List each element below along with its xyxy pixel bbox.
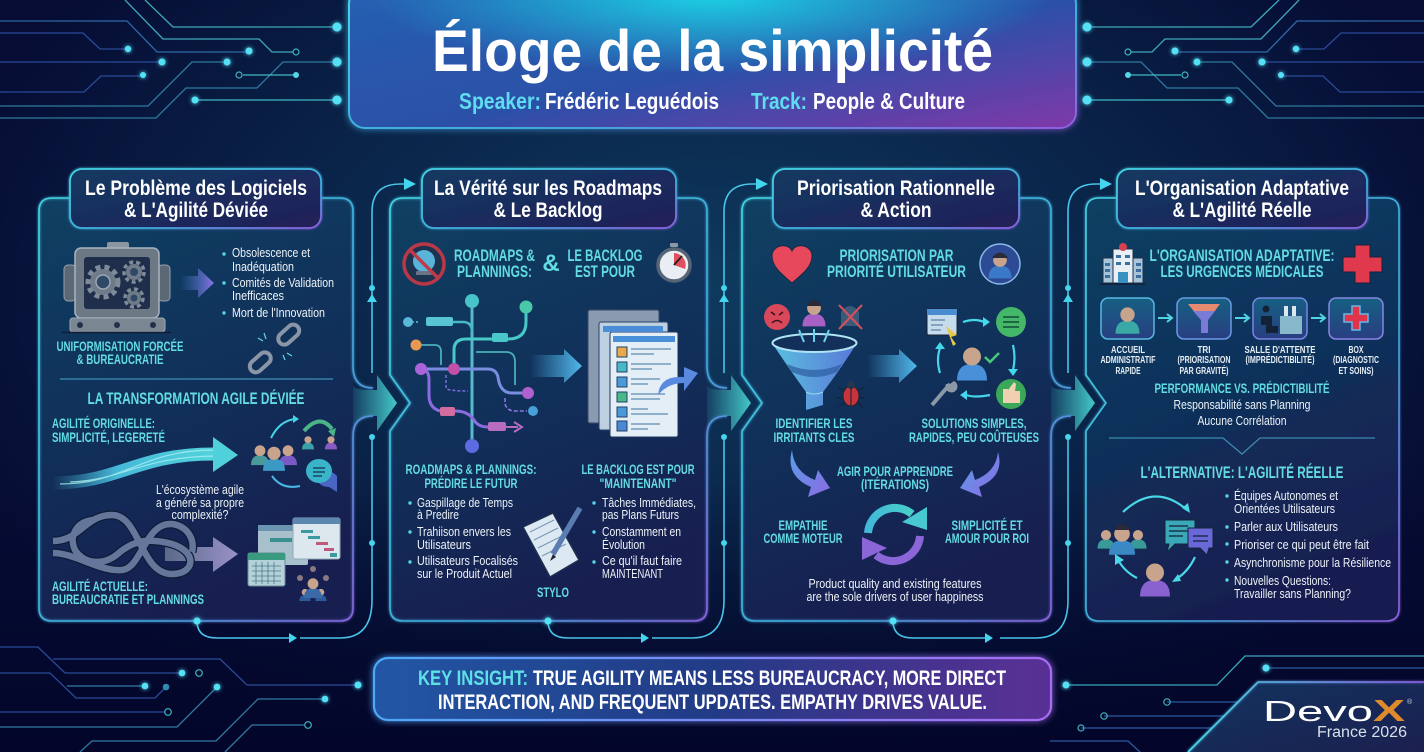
footnote text bbox=[806, 576, 984, 604]
panel 4: organisation adaptative bbox=[1086, 169, 1399, 621]
speaker and track: Speaker: bbox=[459, 88, 541, 114]
callout: key insight: INTERACTION, AND FREQUENT UPDATES. EMPATHY DRIVES VALUE. bbox=[438, 691, 987, 714]
connector: panel 1 to panel 2 bbox=[194, 178, 416, 643]
column heading: backlog bbox=[582, 461, 694, 491]
bullet list: backlog: Ce qu'il faut faire bbox=[602, 553, 682, 568]
label: irritants: IRRITANTS CLES bbox=[774, 429, 854, 445]
bullet list: alternative: Prioriser ce qui peut être fait bbox=[1234, 537, 1369, 552]
icon: frustrated user bbox=[802, 300, 826, 326]
heading tab bbox=[70, 169, 321, 228]
bullet list: roadmaps: sur le Produit Actuel bbox=[417, 566, 512, 581]
label: irritants bbox=[774, 415, 854, 445]
question text bbox=[156, 482, 244, 522]
step: box: BOX bbox=[1348, 344, 1364, 356]
arrow: machine to consequences bbox=[180, 268, 214, 298]
bullet list: consequences bbox=[222, 245, 334, 320]
bullet list: alternative: Orientées Utilisateurs bbox=[1234, 501, 1335, 516]
label: empathie: EMPATHIE bbox=[778, 517, 828, 533]
arrow: step 3 to 4 bbox=[1311, 314, 1325, 322]
icon: notepad and pen bbox=[523, 508, 580, 577]
bullet list: roadmaps bbox=[408, 495, 518, 581]
bullet list: consequences: Inadéquation bbox=[232, 259, 294, 274]
column heading: backlog: LE BACKLOG EST POUR bbox=[582, 461, 694, 477]
column heading: roadmaps: ROADMAPS & PLANNINGS: bbox=[406, 461, 536, 477]
header banner bbox=[349, 0, 1076, 128]
bullet list: consequences: Inefficaces bbox=[232, 288, 284, 303]
bullet list: roadmaps: Gaspillage de Temps bbox=[417, 495, 513, 510]
label: solutions: RAPIDES, PEU COÛTEUSES bbox=[909, 428, 1039, 445]
step: box bbox=[1329, 298, 1383, 377]
label: empathie bbox=[764, 517, 842, 546]
speaker and track: Frédéric Leguédois bbox=[545, 88, 719, 114]
connector: panel 2 to panel 3 bbox=[544, 178, 768, 643]
arrow: swoosh agile bbox=[52, 437, 238, 484]
label: solutions bbox=[909, 415, 1039, 445]
subheading: priorisation bbox=[827, 247, 966, 281]
circuit decoration: bottom right bbox=[1050, 656, 1424, 752]
label: empathie: COMME MOTEUR bbox=[764, 530, 842, 546]
heading tab: Priorisation Rationnelle bbox=[797, 177, 995, 200]
heading tab: & Le Backlog bbox=[494, 199, 602, 222]
diagram: solutions cycle bbox=[927, 307, 1026, 409]
heading tab bbox=[773, 169, 1019, 228]
connector: panel 3 to panel 4 bbox=[890, 178, 1112, 643]
circuit decoration: bottom left bbox=[0, 647, 362, 752]
question text: a généré sa propre bbox=[156, 495, 244, 510]
icon: hospital bbox=[1100, 243, 1145, 284]
panel frame bbox=[390, 198, 751, 621]
arrow: step 2 to 3 bbox=[1235, 314, 1249, 322]
step: tri: PAR GRAVITÉ) bbox=[1180, 364, 1228, 377]
bullet list: consequences: Obsolescence et bbox=[232, 245, 310, 260]
footnote text: are the sole drivers of user happiness bbox=[806, 589, 984, 604]
heading tab: & L'Agilité Réelle bbox=[1172, 199, 1312, 222]
speaker and track bbox=[459, 88, 965, 114]
label: agilité originelle: AGILITÉ ORIGINELLE: bbox=[52, 415, 155, 431]
column heading: backlog: "MAINTENANT" bbox=[600, 475, 676, 491]
panel 2: roadmaps and backlog bbox=[390, 169, 751, 621]
label: agilité actuelle: AGILITÉ ACTUELLE: bbox=[52, 578, 148, 594]
icon: iteration cycle bbox=[862, 507, 927, 561]
icon: angry face bbox=[764, 304, 790, 330]
bullet list: roadmaps: Utilisateurs bbox=[417, 537, 471, 552]
column heading: roadmaps bbox=[406, 461, 536, 491]
subheading: priorisation: PRIORISATION PAR bbox=[840, 247, 954, 265]
label: agilité actuelle: BUREAUCRATIE ET PLANNINGS bbox=[52, 591, 204, 607]
bullet list: alternative: Travailler sans Planning? bbox=[1234, 586, 1351, 601]
icon: crossed obstacle bbox=[839, 305, 862, 329]
bullet list: alternative bbox=[1225, 488, 1391, 601]
logo: Devoxx France 2026 bbox=[1188, 682, 1424, 752]
arrow: step 1 to 2 bbox=[1158, 314, 1172, 322]
label: agir pour apprendre: (ITÉRATIONS) bbox=[861, 476, 929, 492]
step: accueil bbox=[1100, 298, 1156, 377]
question text: complexité? bbox=[172, 507, 228, 522]
label: simplicité bbox=[945, 517, 1029, 546]
arrow: curved left bbox=[791, 450, 830, 497]
step: accueil: ADMINISTRATIF bbox=[1100, 354, 1156, 366]
icon: funnel bbox=[772, 329, 857, 410]
subheading: roadmaps: PLANNINGS: bbox=[457, 263, 532, 281]
footnote text: Product quality and existing features bbox=[808, 576, 982, 591]
subheading: roadmaps bbox=[454, 247, 535, 281]
label: irritants: IDENTIFIER LES bbox=[776, 415, 852, 431]
text block: performance: PERFORMANCE VS. PRÉDICTIBILITÉ bbox=[1154, 380, 1330, 396]
label: agilité originelle bbox=[52, 415, 165, 445]
icon: crossed crystal ball bbox=[404, 244, 444, 284]
panel 3: priorisation bbox=[742, 169, 1095, 621]
icon: stopwatch bbox=[658, 243, 690, 281]
step: accueil: ACCUEIL bbox=[1111, 344, 1145, 356]
label: simplicité: SIMPLICITÉ ET bbox=[952, 517, 1023, 533]
icon: user avatar bbox=[980, 244, 1020, 284]
panel frame bbox=[1086, 198, 1399, 621]
label: stylo: STYLO bbox=[537, 584, 569, 600]
subheading: backlog: EST POUR bbox=[575, 263, 635, 281]
bullet list: roadmaps: Utilisateurs Focalisés bbox=[417, 553, 518, 568]
label: agilité actuelle bbox=[52, 578, 204, 607]
speaker and track: Track: bbox=[751, 88, 807, 114]
bullet list: backlog: pas Plans Futurs bbox=[602, 507, 679, 522]
icon: gantt charts and calendar bbox=[248, 518, 340, 586]
callout: key insight: TRUE AGILITY MEANS LESS BUREAUCRACY, MORE DIRECT bbox=[533, 667, 1006, 690]
bullet list: alternative: Asynchronisme pour la Résilience bbox=[1234, 555, 1391, 570]
logo: Devoxx France 2026: Devo bbox=[1263, 696, 1373, 728]
text block: performance bbox=[1154, 380, 1330, 428]
panel frame bbox=[39, 198, 397, 621]
arrow: curved right bbox=[960, 452, 999, 497]
step: tri: TRI bbox=[1198, 344, 1211, 356]
step: box: (DIAGNOSTIC bbox=[1333, 354, 1379, 366]
heading tab: Le Problème des Logiciels bbox=[85, 177, 307, 200]
subheading: roadmaps: ROADMAPS & bbox=[454, 247, 535, 265]
icon: bureaucratic group bbox=[297, 566, 329, 601]
callout: key insight bbox=[374, 658, 1051, 720]
bullet list: alternative: Parler aux Utilisateurs bbox=[1234, 519, 1338, 534]
step: salle d'attente: SALLE D'ATTENTE bbox=[1244, 344, 1316, 356]
speaker and track: People & Culture bbox=[813, 88, 965, 114]
bullet list: consequences: Mort de l'Innovation bbox=[232, 305, 325, 320]
heading tab: L'Organisation Adaptative bbox=[1135, 177, 1349, 200]
ampersand: & bbox=[542, 250, 560, 277]
panel frame bbox=[742, 198, 1095, 621]
bullet list: backlog: MAINTENANT bbox=[602, 566, 663, 581]
icon: bug bbox=[837, 381, 865, 407]
label: agir pour apprendre: AGIR POUR APPRENDRE bbox=[837, 463, 953, 479]
icon: red cross bbox=[1343, 245, 1382, 283]
bullet list: backlog: Évolution bbox=[602, 537, 645, 552]
label: uniformisation: & BUREAUCRATIE bbox=[76, 351, 164, 367]
icon: machine with gears bbox=[62, 242, 171, 332]
icon: broken chain bbox=[247, 322, 302, 375]
subheading: urgences: L'ORGANISATION ADAPTATIVE: bbox=[1150, 247, 1334, 265]
arrow: funnel to solutions bbox=[867, 349, 917, 383]
label: agir pour apprendre bbox=[837, 463, 953, 492]
chart: roadmap metro map bbox=[403, 294, 538, 453]
bullet list: backlog: Constamment en bbox=[602, 524, 681, 539]
arrow: tangled knot bbox=[53, 515, 238, 574]
bullet list: consequences: Comités de Validation bbox=[232, 275, 334, 290]
logo: Devoxx France 2026: ® bbox=[1407, 698, 1413, 706]
subheading: backlog: LE BACKLOG bbox=[568, 247, 642, 265]
label: uniformisation bbox=[56, 338, 184, 367]
step: tri: (PRIORISATION bbox=[1178, 354, 1230, 366]
logo: Devoxx France 2026: X bbox=[1373, 693, 1405, 728]
section heading: transformation agile: LA TRANSFORMATION AGILE DÉVIÉE bbox=[88, 389, 304, 408]
arrow: roadmap to backlog bbox=[530, 349, 582, 383]
logo: Devoxx France 2026: France 2026 bbox=[1317, 724, 1407, 741]
label: uniformisation: UNIFORMISATION FORCÉE bbox=[56, 338, 184, 354]
bullet list: backlog: Tâches Immédiates, bbox=[602, 495, 696, 510]
circuit decoration: top right bbox=[1082, 0, 1424, 118]
bullet list: backlog bbox=[592, 495, 696, 581]
callout: key insight: KEY INSIGHT: bbox=[418, 667, 528, 690]
icon: team with feedback loops bbox=[251, 415, 337, 492]
panel 1: problème des logiciels bbox=[39, 169, 397, 621]
heading tab bbox=[1117, 169, 1367, 228]
question text: L'écosystème agile bbox=[156, 482, 244, 497]
bullet list: roadmaps: à Predire bbox=[417, 507, 459, 522]
icon: heart bbox=[772, 246, 812, 283]
icon: team cycle bbox=[1098, 496, 1213, 596]
label: simplicité: AMOUR POUR ROI bbox=[945, 530, 1029, 546]
step: salle d'attente bbox=[1244, 298, 1316, 366]
subheading: priorisation: PRIORITÉ UTILISATEUR bbox=[827, 262, 966, 281]
heading tab: & Action bbox=[860, 199, 932, 222]
text block: performance: Responsabilité sans Planning bbox=[1174, 397, 1310, 412]
heading tab: La Vérité sur les Roadmaps bbox=[434, 177, 662, 200]
step: accueil: RAPIDE bbox=[1116, 365, 1140, 377]
subheading: urgences bbox=[1150, 247, 1334, 281]
section heading: alternative: L'ALTERNATIVE: L'AGILITÉ RÉELLE bbox=[1140, 463, 1344, 482]
label: solutions: SOLUTIONS SIMPLES, bbox=[922, 415, 1026, 431]
bullet list: alternative: Nouvelles Questions: bbox=[1234, 573, 1331, 588]
step: tri bbox=[1177, 298, 1231, 377]
column heading: roadmaps: PRÉDIRE LE FUTUR bbox=[424, 475, 518, 491]
heading tab: & L'Agilité Déviée bbox=[124, 199, 268, 222]
subheading: backlog bbox=[568, 247, 642, 281]
bullet list: roadmaps: Trahiison envers les bbox=[417, 524, 511, 539]
subheading: urgences: LES URGENCES MÉDICALES bbox=[1160, 262, 1324, 281]
step: salle d'attente: (IMPRÉDICTIBILITÉ) bbox=[1246, 353, 1314, 366]
heading tab bbox=[422, 169, 676, 228]
title: Éloge de la simplicité bbox=[432, 19, 993, 84]
step: box: ET SOINS) bbox=[1338, 365, 1374, 377]
label: agilité originelle: SIMPLICITÉ, LEGERETÉ bbox=[52, 429, 165, 445]
circuit decoration: top left bbox=[0, 0, 342, 118]
text block: performance: Aucune Corrélation bbox=[1198, 413, 1286, 428]
icon: backlog document stack bbox=[588, 310, 698, 437]
bullet list: alternative: Équipes Autonomes et bbox=[1234, 488, 1338, 503]
